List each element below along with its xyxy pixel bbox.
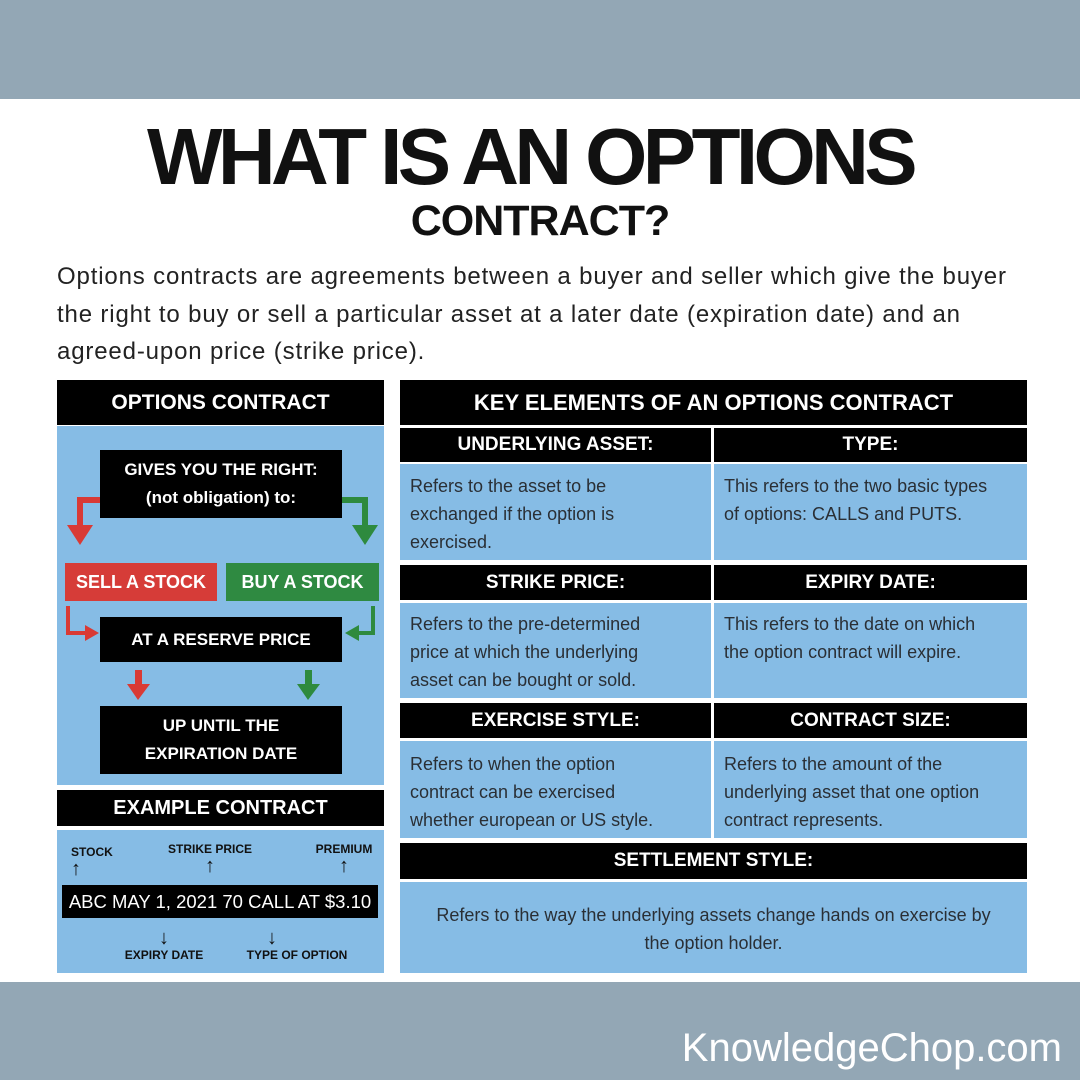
cell: expiry date: the option contract will expire.	[724, 642, 961, 662]
cell: underlying asset: exercised.	[410, 532, 492, 552]
label: strike price: STRIKE PRICE	[168, 842, 252, 856]
cell: underlying asset: Refers to the asset to be	[410, 476, 606, 496]
heading: key elements	[400, 380, 1027, 425]
box: gives you the right: (not obligation) to:	[146, 488, 296, 507]
cell: settlement style: Refers to the way the underlying assets change hands on exercise by	[436, 905, 991, 925]
label: expiry date	[125, 927, 203, 962]
label: strike price: ↑	[205, 855, 215, 877]
cell: contract size: CONTRACT SIZE:	[790, 710, 951, 730]
cell: type: This refers to the two basic types	[724, 476, 987, 496]
box: expiration: UP UNTIL THE	[163, 716, 279, 735]
box: gives you the right	[100, 450, 342, 518]
panel: example contract	[57, 790, 384, 973]
heading: example contract: EXAMPLE CONTRACT	[113, 796, 328, 818]
label: premium	[316, 842, 372, 877]
intro paragraph: Options contracts are agreements between a buyer and seller which give the buyer	[57, 263, 1007, 290]
intro paragraph: the right to buy or sell a particular asset at a later date (expiration date) and an	[57, 300, 961, 328]
cell: exercise style: contract can be exercised	[410, 782, 615, 802]
cell: exercise style: Refers to when the option	[410, 754, 615, 774]
cell: contract size: Refers to the amount of the	[724, 754, 942, 774]
cell: expiry date	[714, 565, 1027, 698]
label: type of option	[246, 927, 347, 962]
box: reserve price	[100, 617, 342, 662]
cell: contract size	[714, 703, 1027, 838]
box: reserve price: AT A RESERVE PRICE	[131, 630, 311, 648]
cell: settlement style: SETTLEMENT STYLE:	[614, 850, 813, 871]
box: buy a stock	[226, 563, 379, 601]
heading: options contract: OPTIONS CONTRACT	[111, 390, 330, 414]
cell: type: TYPE:	[843, 434, 898, 455]
cell: underlying asset: exchanged if the option is	[410, 504, 614, 524]
cell: strike price: Refers to the pre-determined	[410, 614, 640, 634]
label: premium: PREMIUM	[316, 842, 372, 856]
top bar	[0, 0, 1080, 99]
cell: strike price: price at which the underlying	[410, 642, 638, 662]
cell: contract size: underlying asset that one option	[724, 782, 979, 802]
cell: settlement style: the option holder.	[644, 933, 783, 953]
cell: underlying asset: UNDERLYING ASSET:	[457, 434, 654, 455]
label: expiry date: EXPIRY DATE	[125, 948, 203, 962]
cell: contract size: contract represents.	[724, 810, 883, 830]
label: premium: ↑	[339, 855, 349, 877]
cell: underlying asset	[400, 428, 711, 560]
contract bar	[62, 885, 378, 918]
intro paragraph	[57, 263, 1007, 365]
heading: key elements: KEY ELEMENTS OF AN OPTIONS CONTRACT	[474, 390, 953, 414]
cell: exercise style: EXERCISE STYLE:	[471, 710, 640, 730]
label: type of option: TYPE OF OPTION	[247, 948, 347, 962]
box: sell a stock	[65, 563, 217, 601]
label: expiry date: ↓	[159, 927, 169, 949]
cell: type	[714, 428, 1027, 560]
cell: strike price: STRIKE PRICE:	[486, 572, 625, 592]
brand: KnowledgeChop.com: KnowledgeChop.com	[682, 1026, 1062, 1070]
panel: options contract	[57, 380, 384, 785]
box: sell a stock: SELL A STOCK	[76, 572, 206, 592]
cell: expiry date: EXPIRY DATE:	[805, 572, 936, 592]
contract bar: ABC MAY 1, 2021 70 CALL AT $3.10	[69, 890, 371, 912]
label: type of option: ↓	[267, 927, 277, 949]
heading: options contract	[57, 380, 384, 425]
box: expiration	[100, 706, 342, 774]
panel: key elements	[400, 380, 1027, 973]
box: expiration: EXPIRATION DATE	[145, 744, 297, 763]
title: WHAT IS AN OPTIONS	[147, 112, 913, 201]
box: buy a stock: BUY A STOCK	[241, 572, 364, 592]
label: stock: ↑	[71, 858, 81, 880]
cell: strike price	[400, 565, 711, 698]
flowchart arrows	[66, 497, 378, 700]
cell: expiry date: This refers to the date on which	[724, 614, 975, 634]
label: stock	[71, 845, 113, 880]
cell: strike price: asset can be bought or sold.	[410, 670, 636, 690]
intro paragraph: agreed-upon price (strike price).	[57, 338, 425, 365]
cell: type: of options: CALLS and PUTS.	[724, 504, 962, 524]
heading: example contract	[57, 790, 384, 826]
cell: exercise style: whether european or US style.	[410, 810, 653, 830]
box: gives you the right: GIVES YOU THE RIGHT:	[124, 460, 318, 479]
label: strike price	[168, 842, 252, 877]
cell: settlement style	[400, 843, 1027, 973]
label: stock: STOCK	[71, 845, 113, 859]
subtitle: CONTRACT?	[411, 197, 669, 245]
cell: exercise style	[400, 703, 711, 838]
bottom bar	[0, 982, 1080, 1080]
